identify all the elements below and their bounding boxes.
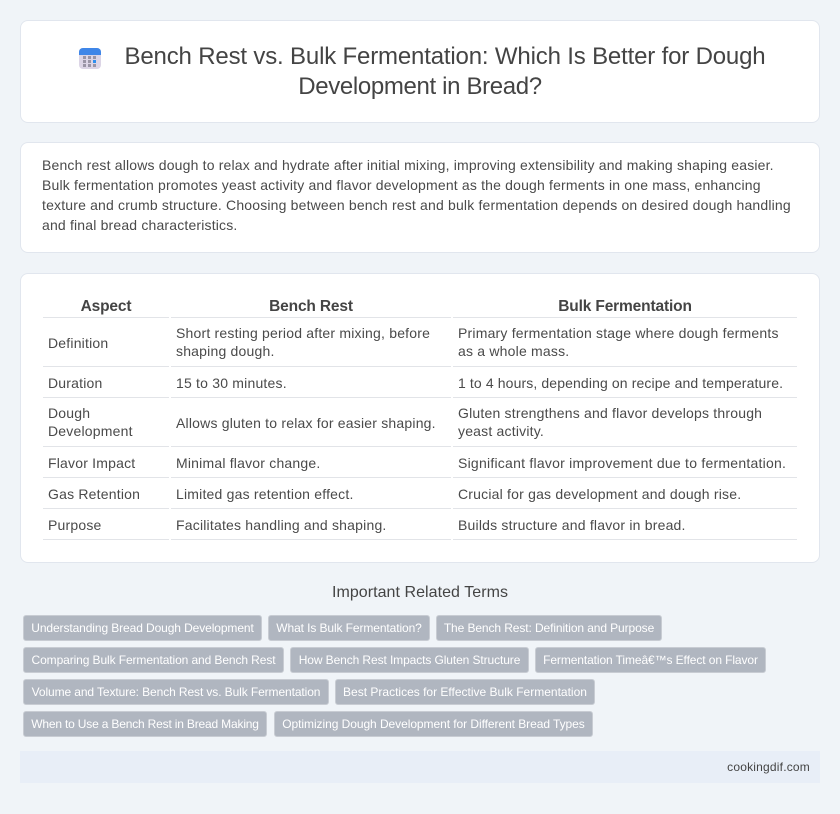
- tag list: related terms: Best Practices for Effective Bulk Fermentation: [343, 685, 587, 699]
- tag list: related terms: Optimizing Dough Development for Different Bread Types: [282, 717, 585, 731]
- table rows: Minimal flavor change.: [176, 455, 320, 471]
- tag list: related terms: When to Use a Bench Rest in Bread Making: [31, 717, 259, 731]
- table rows: Purpose: [48, 517, 102, 533]
- table rows: yeast activity.: [458, 423, 544, 439]
- table rows: Limited gas retention effect.: [176, 486, 354, 502]
- tag list: related terms: [23, 615, 766, 737]
- panel: comparison table: [20, 273, 820, 563]
- title: Development in Bread?: [298, 73, 542, 100]
- table rows: Development: [48, 423, 133, 439]
- table rows: Crucial for gas development and dough rise.: [458, 486, 741, 502]
- table rows: Builds structure and flavor in bread.: [458, 517, 686, 533]
- title: Bench Rest vs. Bulk Fermentation: Which Is Better for Dough: [125, 43, 765, 70]
- table rows: Duration: [48, 375, 103, 391]
- table rows: as a whole mass.: [458, 343, 569, 359]
- tag list: related terms: How Bench Rest Impacts Gluten Structure: [299, 653, 520, 667]
- tag list: related terms: The Bench Rest: Definition and Purpose: [444, 621, 654, 635]
- intro text: Bench rest allows dough to relax and hydrate after initial mixing, improving extensibility and making shaping easier.: [42, 157, 774, 173]
- table rows: Gluten strengthens and flavor develops through: [458, 405, 762, 421]
- intro text: texture and crumb structure. Choosing between bench rest and bulk fermentation depends on desired dough handling: [42, 197, 791, 213]
- footer bar: [20, 751, 820, 783]
- tag list: related terms: Comparing Bulk Fermentation and Bench Rest: [32, 653, 275, 667]
- table rows: [43, 317, 797, 540]
- table rows: Definition: [48, 335, 108, 351]
- intro text: Bulk fermentation promotes yeast activity and flavor development as the dough ferments in one mass, enhancing: [42, 177, 761, 193]
- table header: Bulk Fermentation: [558, 298, 692, 315]
- table rows: 1 to 4 hours, depending on recipe and temperature.: [458, 375, 783, 391]
- table rows: Allows gluten to relax for easier shaping.: [176, 415, 436, 431]
- intro text: and final bread characteristics.: [42, 217, 237, 233]
- table rows: Significant flavor improvement due to fermentation.: [458, 455, 786, 471]
- table rows: Primary fermentation stage where dough ferments: [458, 325, 779, 341]
- tag list: related terms: Understanding Bread Dough Development: [31, 621, 254, 635]
- table rows: Dough: [48, 405, 90, 421]
- table rows: Facilitates handling and shaping.: [176, 517, 387, 533]
- tag list: related terms: Volume and Texture: Bench Rest vs. Bulk Fermentation: [32, 685, 320, 699]
- table header: [81, 298, 692, 315]
- table header: Bench Rest: [269, 298, 353, 315]
- footer source text: cookingdif.com: [727, 760, 810, 774]
- table rows: Gas Retention: [48, 486, 140, 502]
- tag list: related terms: Fermentation Timeâ€™s Effect on Flavor: [543, 653, 758, 667]
- panel: header: [20, 20, 820, 123]
- title: [125, 43, 765, 100]
- icon: calendar: [79, 48, 101, 69]
- panel: introduction: [20, 142, 820, 253]
- table rows: 15 to 30 minutes.: [176, 375, 287, 391]
- intro text: [42, 157, 791, 233]
- tag list: related terms: What Is Bulk Fermentation?: [276, 621, 422, 635]
- table header: Aspect: [81, 298, 131, 315]
- table rows: Flavor Impact: [48, 455, 135, 471]
- heading: related terms: Important Related Terms: [332, 584, 508, 601]
- table rows: Short resting period after mixing, before: [176, 325, 430, 341]
- table rows: shaping dough.: [176, 343, 275, 359]
